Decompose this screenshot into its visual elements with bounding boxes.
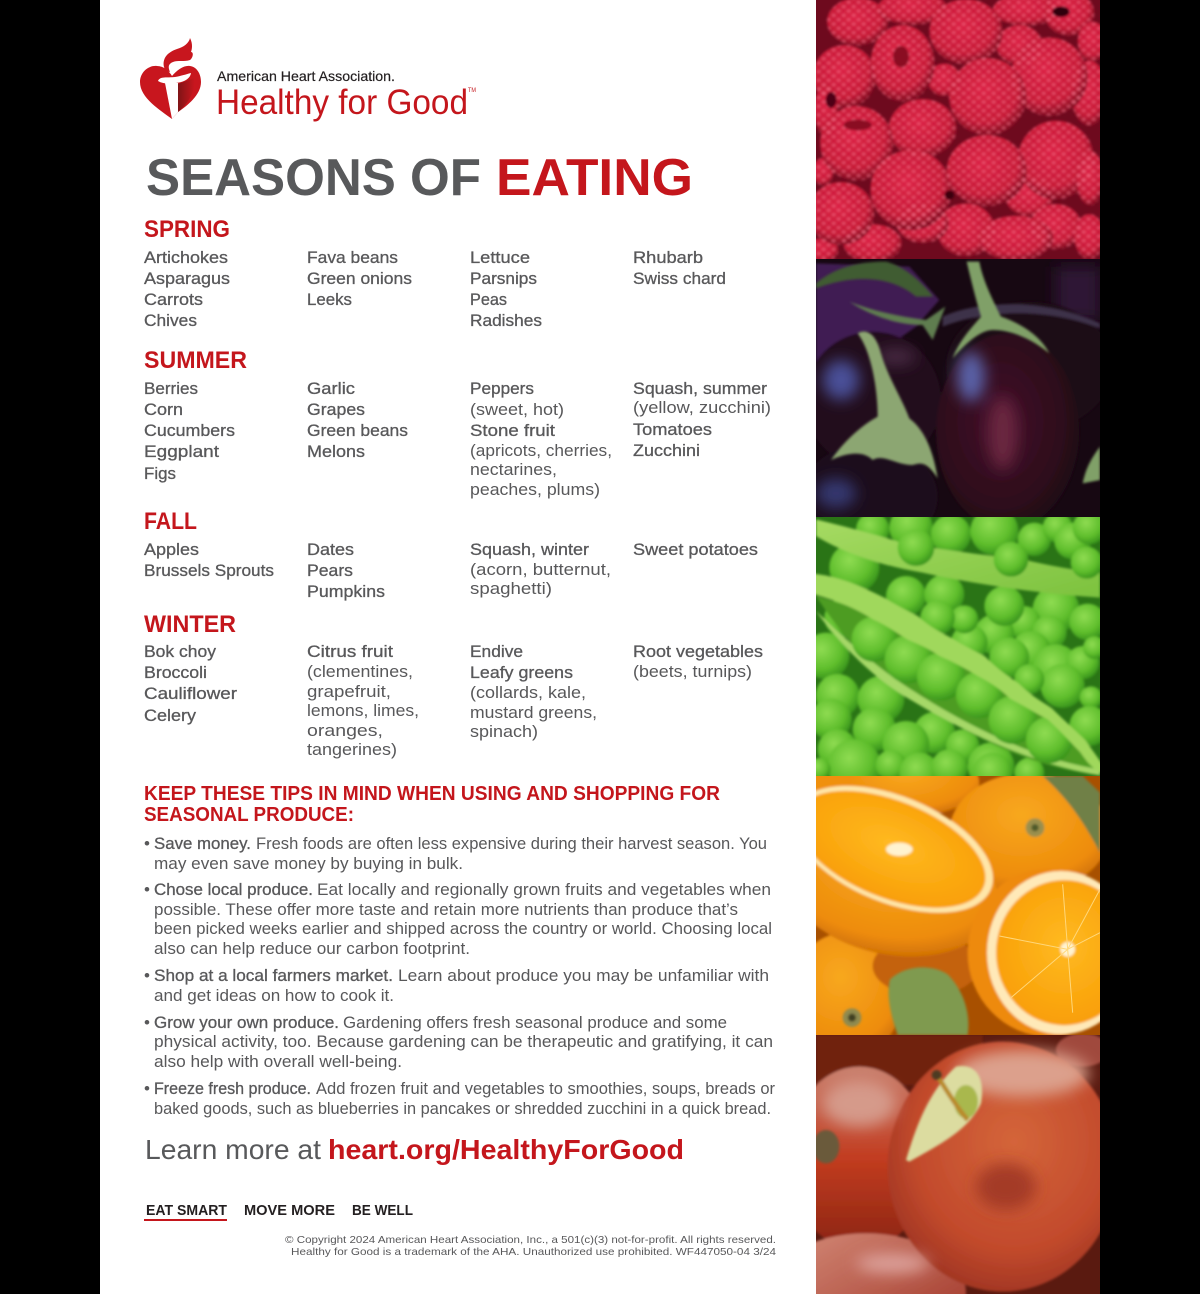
- tip: grow your own: •: [144, 1013, 150, 1032]
- tip: local produce: been picked weeks earlier and shipped across the country or world. Choosing local: [154, 919, 772, 938]
- photo: raspberries: [807, 0, 1108, 263]
- tip: grow your own: physical activity, too. Because gardening can be therapeutic and gratifying, it can: [154, 1032, 773, 1051]
- tip: save money: [144, 834, 767, 873]
- section: spring: Swiss chard: [633, 269, 726, 288]
- photo: peas: [816, 517, 1100, 776]
- lower pod upper shell: [816, 578, 1100, 768]
- tip: grow your own: [144, 1013, 773, 1071]
- learn more call to action: [145, 1134, 684, 1165]
- section: spring: Parsnips: [470, 269, 537, 288]
- section: spring: Rhubarb: [633, 248, 703, 267]
- tip: grow your own: Grow your own produce.: [154, 1013, 339, 1032]
- copyright: [285, 1234, 776, 1258]
- title: EATING: [496, 149, 693, 207]
- section: spring: Carrots: [144, 290, 203, 309]
- tip: save money: may even save money by buying in bulk.: [154, 854, 463, 873]
- section: spring: Leeks: [307, 290, 352, 309]
- tips heading: KEEP THESE TIPS IN MIND WHEN USING AND SHOPPING FOR: [144, 783, 721, 805]
- tip: grow your own: also help with overall well-being.: [154, 1052, 402, 1071]
- section: winter: Leafy greens: [470, 663, 573, 682]
- section: summer: Squash, summer: [633, 379, 767, 398]
- section: summer: nectarines,: [470, 460, 557, 479]
- lower pod back shell: [816, 596, 1100, 775]
- section: summer: (apricots, cherries,: [470, 441, 612, 460]
- section: fall: Apples: [144, 540, 199, 559]
- section: summer: Green beans: [307, 421, 408, 440]
- wordmark: American Heart Association: American Heart Association.: [217, 68, 395, 84]
- tip: freeze: Add frozen fruit and vegetables to smoothies, soups, breads or: [316, 1079, 775, 1098]
- tip: farmers market: Shop at a local farmers market.: [154, 966, 393, 985]
- section: winter: lemons, limes,: [307, 701, 419, 720]
- tip: farmers market: [144, 966, 769, 1005]
- tip: save money: Save money.: [154, 834, 251, 853]
- copyright: Healthy for Good is a trademark of the AHA. Unauthorized use prohibited. WF447050-04 3/24: [291, 1246, 776, 1258]
- tips heading: [144, 783, 721, 826]
- section: winter: (clementines,: [307, 662, 413, 681]
- navigation tags: MOVE MORE: [244, 1202, 335, 1219]
- section: winter: Citrus fruit: [307, 642, 393, 661]
- section: summer: peaches, plums): [470, 480, 600, 499]
- section: winter: Cauliflower: [144, 684, 237, 703]
- section: summer: Melons: [307, 442, 365, 461]
- section: winter: [144, 611, 763, 759]
- tip: freeze: •: [144, 1079, 150, 1098]
- section: spring: Radishes: [470, 311, 542, 330]
- copyright: © Copyright 2024 American Heart Association, Inc., a 501(c)(3) not-for-profit. All rights reserved.: [285, 1234, 776, 1246]
- section: spring: Chives: [144, 311, 197, 330]
- section: fall: [144, 508, 758, 601]
- tip: freeze: baked goods, such as blueberries in pancakes or shredded zucchini in a quick bread.: [154, 1099, 771, 1118]
- tips heading: SEASONAL PRODUCE:: [144, 804, 354, 826]
- section: winter: (collards, kale,: [470, 683, 586, 702]
- heading: spring: SPRING: [144, 216, 230, 243]
- section: fall: Pumpkins: [307, 582, 385, 601]
- tip: local produce: [144, 880, 772, 958]
- tip: freeze: [144, 1079, 775, 1118]
- section: summer: Corn: [144, 400, 183, 419]
- navigation tags: [144, 1202, 413, 1221]
- tip: local produce: also can help reduce our carbon footprint.: [154, 939, 470, 958]
- section: summer: Eggplant: [144, 442, 219, 461]
- section: summer: Grapes: [307, 400, 365, 419]
- trademark: TM: [468, 88, 476, 94]
- section: summer: (yellow, zucchini): [633, 398, 771, 417]
- section: winter: mustard greens,: [470, 703, 597, 722]
- section: winter: Broccoli: [144, 663, 207, 682]
- section: summer: Cucumbers: [144, 421, 235, 440]
- eggplant highlights: [816, 348, 1018, 508]
- section: summer: [144, 347, 771, 499]
- section: spring: [144, 216, 726, 330]
- section: spring: Artichokes: [144, 248, 228, 267]
- tip: farmers market: Learn about produce you may be unfamiliar with: [398, 966, 769, 985]
- section: spring: Fava beans: [307, 248, 398, 267]
- navigation tags: BE WELL: [352, 1202, 413, 1219]
- learn more call to action: Learn more at: [145, 1134, 321, 1165]
- photo: oranges: [816, 776, 1100, 1035]
- top pod: [816, 519, 1100, 598]
- icon: heart and torch: [140, 38, 201, 119]
- section: summer: Berries: [144, 379, 198, 398]
- tip: local produce: Chose local produce.: [154, 880, 313, 899]
- section: winter: tangerines): [307, 740, 397, 759]
- photo: apples: [816, 1035, 1100, 1294]
- section: spring: Green onions: [307, 269, 412, 288]
- section: winter: oranges,: [307, 721, 383, 740]
- section: spring: Asparagus: [144, 269, 230, 288]
- section: winter: (beets, turnips): [633, 662, 752, 681]
- heading: winter: WINTER: [144, 611, 236, 638]
- learn more call to action: heart.org/HealthyForGood: [328, 1134, 684, 1165]
- section: spring: Lettuce: [470, 248, 530, 267]
- tip: save money: Fresh foods are often less expensive during their harvest season. You: [256, 834, 767, 853]
- tip: local produce: possible. These offer more taste and retain more nutrients than produce that’s: [154, 900, 738, 919]
- section: spring: Peas: [470, 290, 507, 309]
- section: summer: Figs: [144, 464, 176, 483]
- section: summer: Tomatoes: [633, 420, 712, 439]
- tip: local produce: •: [144, 880, 150, 899]
- section: summer: Stone fruit: [470, 421, 555, 440]
- wordmark: Healthy for Good: Healthy for Good: [216, 83, 468, 122]
- section: fall: Squash, winter: [470, 540, 589, 559]
- section: fall: Pears: [307, 561, 353, 580]
- tip: farmers market: and get ideas on how to cook it.: [154, 986, 394, 1005]
- section: summer: Peppers: [470, 379, 534, 398]
- section: winter: grapefruit,: [307, 682, 391, 701]
- section: winter: spinach): [470, 722, 538, 741]
- section: summer: Zucchini: [633, 441, 700, 460]
- heading: summer: SUMMER: [144, 347, 247, 374]
- logo: American Heart Association Healthy for Good: [140, 38, 476, 122]
- section: fall: (acorn, butternut,: [470, 560, 611, 579]
- section: summer: Garlic: [307, 379, 356, 398]
- section: winter: Endive: [470, 642, 523, 661]
- tip: farmers market: •: [144, 966, 150, 985]
- tip: save money: •: [144, 834, 150, 853]
- section: winter: Bok choy: [144, 642, 217, 661]
- navigation tags: EAT SMART: [146, 1202, 227, 1219]
- section: winter: Root vegetables: [633, 642, 763, 661]
- section: winter: Celery: [144, 706, 197, 725]
- heading: fall: FALL: [144, 508, 197, 535]
- tip: freeze: Freeze fresh produce.: [154, 1079, 311, 1098]
- tip: local produce: Eat locally and regionally grown fruits and vegetables when: [317, 880, 771, 899]
- section: fall: Brussels Sprouts: [144, 561, 274, 580]
- section: summer: (sweet, hot): [470, 400, 564, 419]
- section: fall: Sweet potatoes: [633, 540, 758, 559]
- photo: eggplants: [816, 259, 1100, 517]
- eggplant backdrop glow: [1056, 267, 1100, 320]
- section: fall: Dates: [307, 540, 354, 559]
- section: fall: spaghetti): [470, 579, 552, 598]
- title: SEASONS OF: [146, 149, 481, 207]
- page panel: [100, 0, 816, 1294]
- tip: grow your own: Gardening offers fresh seasonal produce and some: [343, 1013, 727, 1032]
